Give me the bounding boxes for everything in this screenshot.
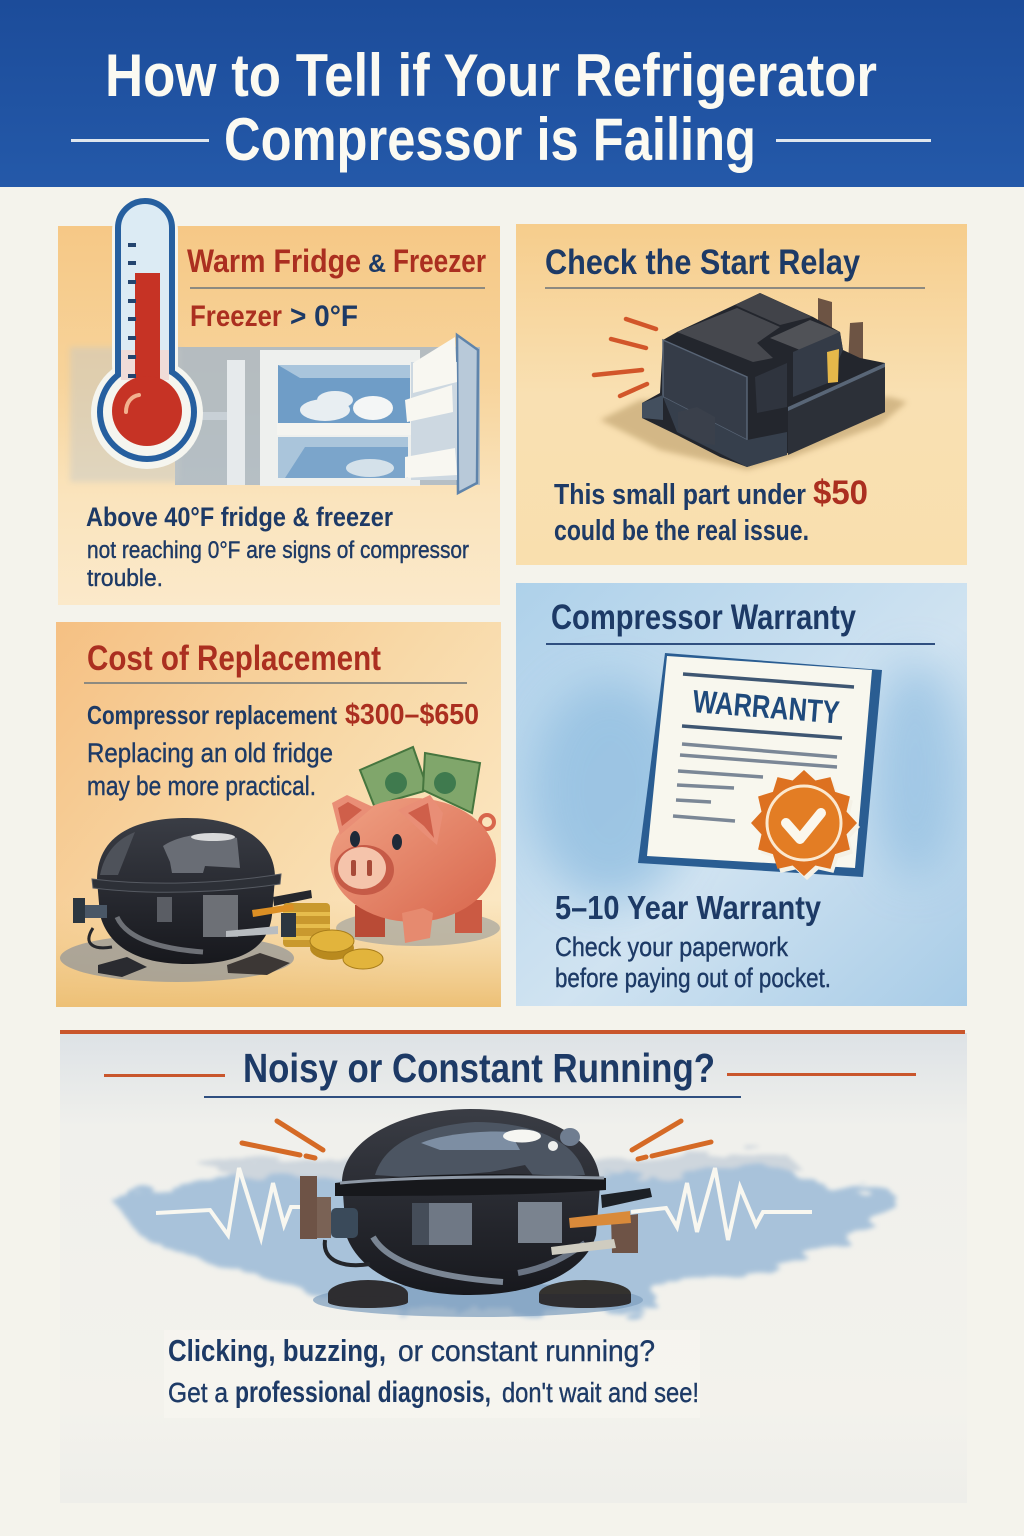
heading: Freezer	[393, 243, 486, 279]
icon: warranty certificate	[638, 653, 882, 880]
heading: &	[368, 250, 386, 278]
title	[105, 42, 877, 173]
body text: may be more practical.	[87, 771, 316, 801]
body text: Compressor replacement	[87, 700, 337, 730]
heading: Compressor Warranty	[551, 598, 856, 637]
panel: noisy or constant running	[60, 1030, 967, 1503]
panel: cost of replacement	[56, 622, 501, 1007]
callout text: don't wait and see!	[502, 1377, 699, 1408]
body text: trouble.	[87, 565, 163, 592]
body text: 5–10 Year Warranty	[555, 889, 822, 926]
blue smudge background	[110, 1148, 895, 1310]
icon: vibration waves	[156, 1168, 812, 1240]
body text: Check your paperwork	[555, 932, 788, 962]
callout text: Clicking, buzzing,	[168, 1333, 386, 1368]
panel: compressor warranty	[516, 583, 967, 1006]
subheading	[190, 300, 358, 333]
icon: compressor	[60, 818, 383, 982]
callout text: or constant running?	[398, 1335, 655, 1368]
callout text: professional diagnosis,	[235, 1376, 491, 1409]
callout text	[164, 1330, 700, 1418]
body text	[554, 474, 868, 547]
body text	[86, 502, 469, 592]
icon: gold coins	[310, 930, 383, 969]
heading: Noisy or Constant Running?	[243, 1045, 715, 1091]
body text: $50	[813, 474, 868, 512]
heading: Cost of Replacement	[87, 639, 381, 678]
subheading: Freezer	[190, 300, 282, 333]
panel: warm fridge and freezer	[58, 198, 500, 605]
body text	[87, 699, 479, 801]
header banner	[0, 0, 1024, 187]
icon: noise lines	[242, 1121, 711, 1159]
panel: check the start relay	[516, 224, 967, 565]
icon: start relay	[594, 293, 907, 470]
heading	[187, 243, 486, 279]
callout text: Get a	[168, 1377, 228, 1408]
body text: This small part under	[554, 479, 806, 511]
body text: Above 40°F fridge & freezer	[86, 502, 393, 532]
icon: warranty certificate: WARRANTY	[691, 683, 841, 731]
body text: $300–$650	[345, 699, 479, 731]
title: How to Tell if Your Refrigerator	[105, 42, 877, 109]
icon: large compressor	[300, 1109, 652, 1317]
subheading: > 0°F	[290, 300, 358, 333]
heading: Warm Fridge	[187, 243, 361, 279]
body text: Replacing an old fridge	[87, 738, 333, 768]
body text: not reaching 0°F are signs of compressor	[87, 537, 469, 564]
body text: could be the real issue.	[554, 515, 809, 547]
title: Compressor is Failing	[224, 106, 756, 173]
heading: Check the Start Relay	[545, 243, 860, 282]
icon: thermometer	[91, 198, 203, 469]
body text	[555, 889, 831, 993]
icon: open freezer	[70, 335, 480, 493]
body text: before paying out of pocket.	[555, 963, 831, 993]
icon: red spark lines	[594, 319, 656, 396]
icon: piggy bank with money	[330, 747, 500, 946]
